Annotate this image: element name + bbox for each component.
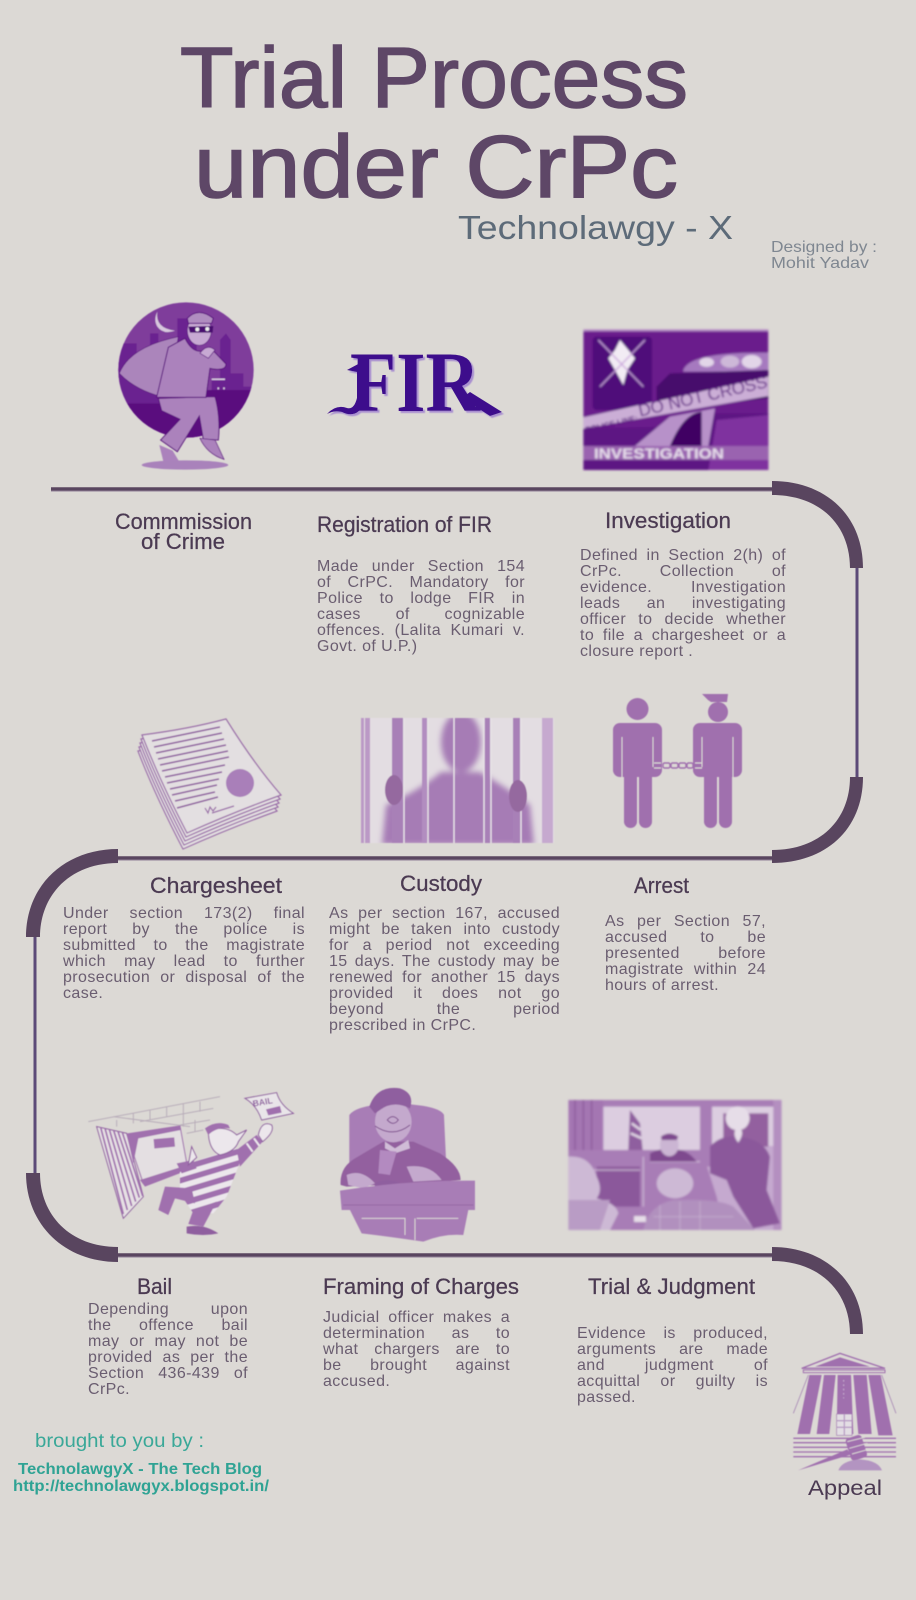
text block: arrest: As per Section 57, [605, 913, 766, 930]
heading: commission of crime: of Crime [141, 529, 225, 554]
photo: courtroom sketch [568, 1100, 782, 1230]
text block: investigation: closure report . [580, 643, 693, 660]
text block: bail: provided as per the [88, 1349, 248, 1366]
text block: trial and judgment: arguments are made [577, 1341, 768, 1358]
text block: custody: might be taken into custody [329, 921, 560, 938]
heading: commission of crime [115, 509, 252, 554]
photo: prisoner behind bars [361, 712, 554, 845]
heading: custody: Custody [400, 871, 482, 896]
icon: chargesheet document stack [138, 719, 281, 849]
title [180, 31, 688, 216]
text block: trial and judgment: passed. [577, 1389, 636, 1406]
text block: registration of FIR: offences. (Lalita Kumari v. [317, 622, 525, 639]
icon: prisoner leaving cell with bail paper: BAIL [252, 1095, 274, 1109]
text block: investigation: Defined in Section 2(h) of [580, 547, 786, 564]
icon: thief with sack [113, 302, 257, 470]
title: under CrPc [194, 117, 678, 216]
text block: investigation: officer to decide whether [580, 611, 786, 628]
photo: police investigation scene: INVESTIGATION [594, 446, 724, 462]
text block: arrest: magistrate within 24 [605, 961, 766, 978]
text block: custody: 15 days. The custody may be [329, 953, 560, 970]
text block: arrest: accused to be [605, 929, 766, 946]
text block: framing of charges: accused. [323, 1373, 390, 1390]
text block: custody: for a period not exceeding [329, 937, 560, 954]
text block: chargesheet: which may lead to further [63, 953, 305, 970]
text block: bail: Depending upon [88, 1301, 248, 1318]
footer: blog credit and URL [13, 1461, 270, 1495]
text block: arrest: hours of arrest. [605, 977, 719, 994]
text block: registration of FIR [317, 558, 525, 655]
appeal label: Appeal [808, 1477, 882, 1500]
title: Trial Process [180, 31, 688, 126]
process timeline path [26, 481, 863, 1334]
icon: prisoner leaving cell with bail paper [88, 1093, 293, 1235]
text block: custody: beyond the period [329, 1001, 560, 1018]
photo: police investigation scene [582, 329, 769, 470]
heading: commission of crime: Commmission [115, 509, 252, 534]
text block: arrest [605, 913, 766, 994]
text block: registration of FIR: Police to lodge FIR in [317, 590, 525, 607]
text block: registration of FIR: Govt. of U.P.) [317, 638, 417, 655]
text block: bail: CrPc. [88, 1381, 130, 1398]
text block: investigation: CrPc. Collection of [580, 563, 786, 580]
text block: investigation: to file a chargesheet or a [580, 627, 786, 644]
text block: bail: Section 436-439 of [88, 1365, 248, 1382]
heading: framing of charges: Framing of Charges [323, 1274, 519, 1299]
heading: bail: Bail [137, 1274, 172, 1299]
text block: investigation [580, 547, 786, 660]
subtitle: Technolawgy - X [458, 209, 733, 246]
designer credit [771, 239, 877, 272]
text block: custody: renewed for another 15 days [329, 969, 560, 986]
text block: custody [329, 905, 560, 1034]
icon: handcuffed prisoner and police officer [613, 694, 742, 828]
text block: framing of charges: determination as to [323, 1325, 510, 1342]
icon: courthouse with gavel [793, 1353, 896, 1470]
text block: trial and judgment: acquittal or guilty is [577, 1373, 768, 1390]
heading: chargesheet: Chargesheet [150, 873, 282, 898]
text block: trial and judgment [577, 1325, 768, 1406]
text block: framing of charges: what chargers are to [323, 1341, 510, 1358]
heading: registration of FIR: Registration of FIR [317, 512, 492, 537]
text block: custody: provided it does not go [329, 985, 560, 1002]
photo: police investigation scene: POLICE LINE: [585, 414, 639, 434]
text block: arrest: presented before [605, 945, 766, 962]
text block: chargesheet: report by the police is [63, 921, 305, 938]
text block: bail: may or may not be [88, 1333, 248, 1350]
heading: arrest: Arrest [634, 873, 689, 898]
text block: registration of FIR: cases of cognizable [317, 606, 525, 623]
heading: investigation: Investigation [605, 508, 731, 533]
text block: registration of FIR: of CrPC. Mandatory for [317, 574, 525, 591]
text block: bail [88, 1301, 248, 1398]
text block: chargesheet: submitted to the magistrate [63, 937, 305, 954]
text block: framing of charges: Judicial officer makes a [323, 1309, 510, 1326]
text block: bail: the offence bail [88, 1317, 248, 1334]
icon: smiling judge at bench [340, 1088, 475, 1242]
photo: police investigation scene: DO NOT CROSS [636, 371, 769, 421]
text block: framing of charges: be brought against [323, 1357, 510, 1374]
footer: blog credit and URL: TechnolawgyX - The Tech Blog [18, 1461, 262, 1478]
heading: trial and judgment: Trial & Judgment [588, 1274, 755, 1299]
text block: investigation: leads an investigating [580, 595, 786, 612]
text block: chargesheet [63, 905, 305, 1002]
text block: trial and judgment: and judgment of [577, 1357, 768, 1374]
footer: blog credit and URL: http://technolawgyx.blogspot.in/ [13, 1478, 270, 1495]
text block: custody: As per section 167, accused [329, 905, 560, 922]
icon: FIR blackletter logo: FIR [350, 334, 481, 430]
text block: chargesheet: prosecution or disposal of the [63, 969, 305, 986]
text block: chargesheet: case. [63, 985, 103, 1002]
text block: custody: prescribed in CrPC. [329, 1017, 476, 1034]
text block: chargesheet: Under section 173(2) final [63, 905, 305, 922]
designer credit: Mohit Yadav [771, 255, 869, 272]
text block: investigation: evidence. Investigation [580, 579, 786, 596]
text block: trial and judgment: Evidence is produced, [577, 1325, 768, 1342]
footer: brought to you by: brought to you by : [35, 1431, 204, 1452]
designer credit: Designed by : [771, 239, 877, 256]
text block: framing of charges [323, 1309, 510, 1390]
text block: registration of FIR: Made under Section 154 [317, 558, 525, 575]
